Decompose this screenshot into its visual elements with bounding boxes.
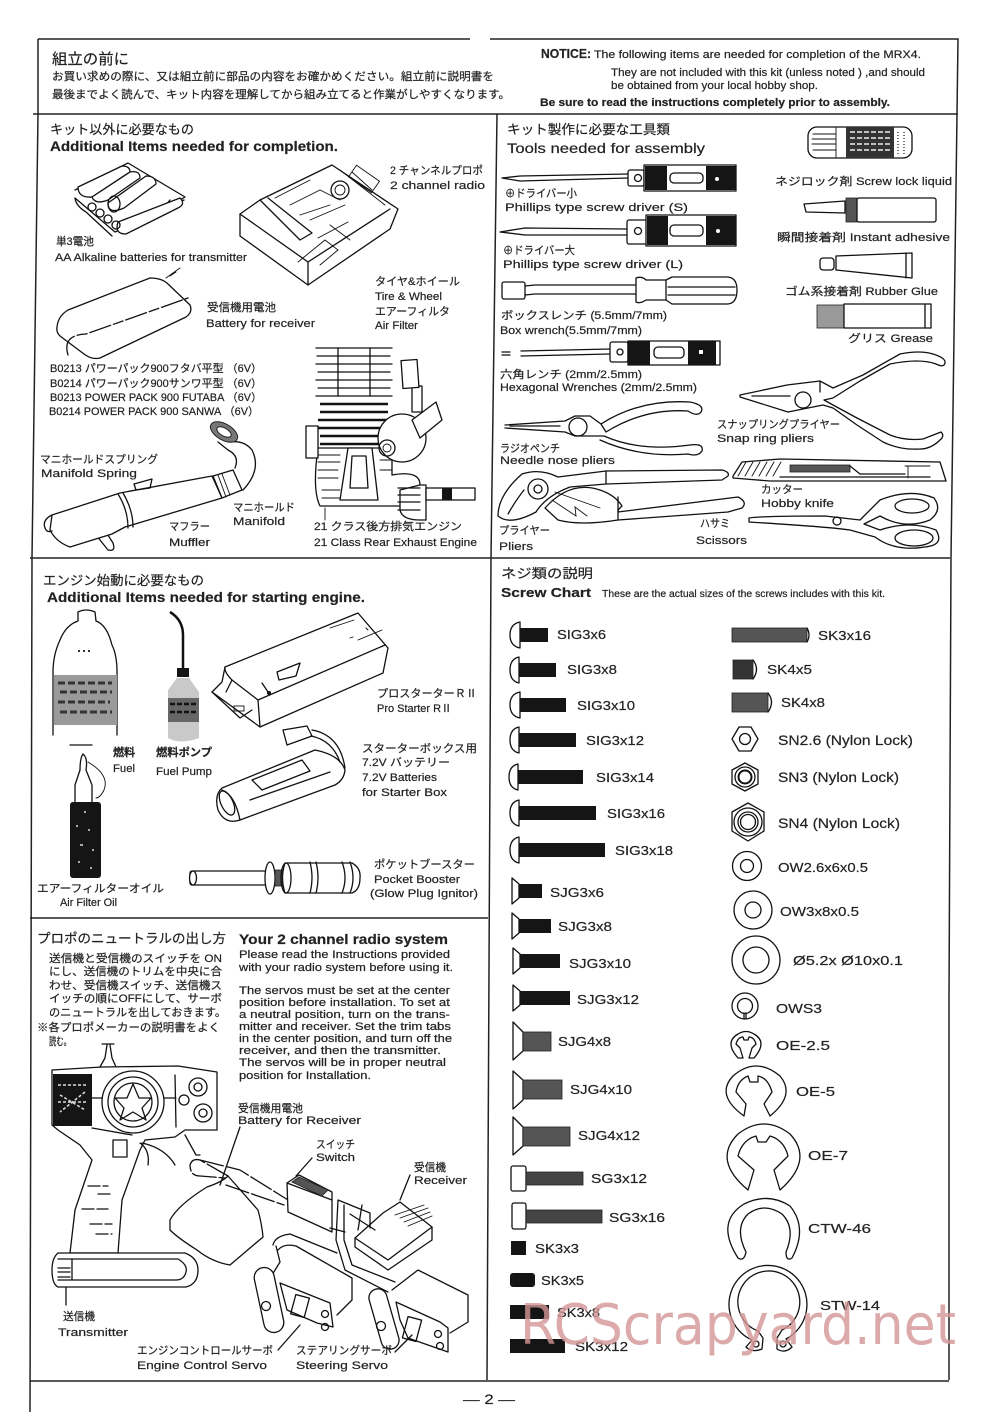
label: engine: 21 Class Rear Exhaust Engine xyxy=(314,537,477,549)
label: battery for receiver xyxy=(206,300,315,330)
panel: notice xyxy=(540,46,925,109)
label: fuel pump: 燃料ポンプ xyxy=(156,745,212,759)
item: OE-7 e-clip: OE-7 xyxy=(808,1148,848,1163)
label: receiver: Receiver xyxy=(414,1175,467,1187)
item: SJG4x10 xyxy=(513,1071,632,1109)
label: transmitter: Transmitter xyxy=(58,1327,128,1339)
label: large phillips screwdriver xyxy=(503,243,683,271)
text block: English instructions: receiver, and then the transmitter. xyxy=(239,1045,441,1057)
label: receiver: 受信機 xyxy=(414,1160,446,1174)
label: manifold spring: Manifold Spring xyxy=(41,468,137,480)
item: SJG3x6 xyxy=(512,878,604,904)
item: SIG3x6: SIG3x6 xyxy=(557,627,606,642)
item: OW3x8x0.5 washer xyxy=(734,891,859,929)
icon: pocket booster xyxy=(190,862,360,894)
label: tire and wheel, air filter: Tire & Wheel xyxy=(375,291,442,303)
item: OWS3 spring washer: OWS3 xyxy=(776,1001,822,1016)
item: SJG4x10: SJG4x10 xyxy=(570,1082,632,1097)
panel: items needed for starting engine xyxy=(37,573,478,909)
item: SIG3x8 xyxy=(510,657,617,683)
label: pliers xyxy=(499,524,550,553)
label: scissors: ハサミ xyxy=(700,517,730,530)
heading: starting engine: エンジン始動に必要なもの xyxy=(43,573,204,588)
text block: Japanese instructions xyxy=(37,951,226,1048)
hardware list: washers xyxy=(732,852,903,1019)
item: SIG3x14 xyxy=(509,764,654,790)
label: fuel xyxy=(113,745,135,775)
label: switch xyxy=(316,1138,355,1164)
hardware list: nuts xyxy=(732,727,913,841)
label: 7.2V batteries: スターターボックス用 xyxy=(362,742,477,755)
label: steering servo xyxy=(296,1335,412,1372)
item: SJG4x8: SJG4x8 xyxy=(558,1034,611,1049)
icon: 7.2V battery with connector xyxy=(216,726,345,821)
label: air filter oil xyxy=(37,882,164,909)
label: fuel: Fuel xyxy=(113,763,135,775)
item: OWS3 spring washer xyxy=(732,993,822,1019)
label: tire and wheel, air filter: エアーフィルタ xyxy=(375,305,450,318)
label: manifold: Manifold xyxy=(233,516,285,528)
text block: Japanese instructions: 読む。 xyxy=(49,1034,71,1048)
item: SG3x16: SG3x16 xyxy=(609,1210,665,1225)
item: STW-14 circlip: STW-14 xyxy=(820,1298,880,1313)
label: battery for receiver xyxy=(238,1101,361,1127)
icon: receiver xyxy=(330,1175,432,1292)
text block: Japanese instructions: にし、送信機のトリムを中央に合 xyxy=(49,964,222,978)
text block: Japanese instructions: わせ、受信機スイッチ、送信機ス xyxy=(49,978,222,992)
heading: screw chart: These are the actual sizes of the screws includes with this kit. xyxy=(602,589,885,600)
icon: hexagonal wrench xyxy=(502,341,720,365)
item: SIG3x10: SIG3x10 xyxy=(577,698,635,713)
icon: receiver battery pack xyxy=(57,268,191,358)
label: 7.2V batteries: for Starter Box xyxy=(362,787,448,799)
item: SIG3x10 xyxy=(510,692,635,718)
label: fuel pump: Fuel Pump xyxy=(156,766,212,778)
icon: switch xyxy=(287,1158,332,1232)
icon: fuel pump bottle xyxy=(168,612,199,742)
item: OE-5 e-clip xyxy=(726,1066,835,1116)
icon: rubber glue tube xyxy=(820,253,912,278)
panel: tools needed for assembly xyxy=(498,122,952,553)
label: power pack part numbers: B0213 パワーパック900フタバ平型 （6V） xyxy=(50,361,262,375)
text block: English instructions xyxy=(238,949,453,1082)
icon: grease tube xyxy=(817,304,931,328)
label: battery for receiver: Battery for receiver xyxy=(206,318,315,330)
item: SK3x16: SK3x16 xyxy=(818,628,871,643)
text block: English instructions: a neutral position, turn on the trans- xyxy=(239,1009,450,1021)
item: SN3 nylon lock nut xyxy=(732,763,899,791)
label: power pack part numbers xyxy=(49,361,262,418)
item: SN2.6 nylon lock nut xyxy=(732,727,913,751)
item: OW2.6x6x0.5 washer: OW2.6x6x0.5 xyxy=(778,860,868,875)
label: needle nose pliers: Needle nose pliers xyxy=(500,455,616,467)
label: AA batteries xyxy=(55,234,247,264)
item: 5.2x10x0.1 washer: Ø5.2x Ø10x0.1 xyxy=(793,953,903,968)
item: SN4 nylon lock nut: SN4 (Nylon Lock) xyxy=(778,815,900,831)
item: SIG3x12: SIG3x12 xyxy=(586,733,644,748)
item: SIG3x16: SIG3x16 xyxy=(607,806,665,821)
panel: additional items needed for completion xyxy=(40,122,485,550)
item: OE-2.5 e-clip: OE-2.5 xyxy=(776,1038,830,1053)
label: AA batteries: 単3電池 xyxy=(56,234,94,248)
heading: tools: キット製作に必要な工具類 xyxy=(507,122,670,137)
label: muffler: Muffler xyxy=(169,537,210,549)
item: SIG3x18: SIG3x18 xyxy=(615,843,673,858)
text block: English instructions: position before installation. To set at xyxy=(239,997,450,1009)
label: hexagonal wrench: Hexagonal Wrenches (2mm/2.5mm) xyxy=(500,382,697,394)
item: SIG3x18 xyxy=(510,837,673,863)
panel: notice: Be sure to read the instructions completely prior to assembly. xyxy=(540,97,890,109)
text block: Japanese instructions: 送信機と受信機のスイッチを ON xyxy=(49,951,222,965)
item: SG3x12: SG3x12 xyxy=(591,1171,647,1186)
item: SK4x5: SK4x5 xyxy=(767,662,812,677)
label: 7.2V batteries: 7.2V バッテリー xyxy=(362,756,450,769)
label: engine control servo: Engine Control Servo xyxy=(137,1360,267,1372)
item: CTW-46 circlip: CTW-46 xyxy=(808,1221,871,1236)
item: SIG3x12 xyxy=(510,727,644,753)
item: OE-2.5 e-clip xyxy=(731,1032,830,1058)
item: 5.2x10x0.1 washer xyxy=(732,936,903,984)
item: OE-7 e-clip xyxy=(727,1124,848,1190)
label: grease: グリス Grease xyxy=(848,331,933,345)
label: pocket booster: Pocket Booster xyxy=(374,874,460,886)
label: muffler xyxy=(169,521,210,549)
icon: hobby knife xyxy=(733,459,946,481)
panel: notice: be obtained from your local hobby shop. xyxy=(611,80,818,92)
heading: starting engine: Additional Items needed for starting engine. xyxy=(47,589,365,605)
label: 7.2V batteries xyxy=(362,742,477,799)
label: hobby knife xyxy=(761,483,834,510)
label: 7.2V batteries: 7.2V Batteries xyxy=(362,772,438,784)
icon: scissors xyxy=(749,493,939,548)
label: engine control servo xyxy=(137,1325,300,1372)
label: 2 channel radio: 2 チャンネルプロポ xyxy=(390,164,483,177)
item: SK3x8: SK3x8 xyxy=(557,1305,600,1320)
item: SJG3x6: SJG3x6 xyxy=(550,885,604,900)
label: small phillips screwdriver: ⊕ドライバー小 xyxy=(505,187,577,200)
heading: additional items xyxy=(50,122,338,154)
icon: needle nose pliers xyxy=(505,402,702,455)
text block: Japanese instructions: のニュートラルを出しておきます。 xyxy=(49,1006,226,1019)
watermark: RCScrapyard.net xyxy=(520,1293,956,1358)
icon: fuel bottle xyxy=(53,610,117,745)
label: manifold spring: マニホールドスプリング xyxy=(40,452,158,466)
item: SG3x12 xyxy=(511,1166,647,1191)
icon: 21 class engine xyxy=(306,348,475,520)
heading: screw chart: ネジ類の説明 xyxy=(501,566,593,581)
label: pro starter: Pro Starter RⅡ xyxy=(377,703,452,715)
label: power pack part numbers: B0213 POWER PACK 900 FUTABA （6V） xyxy=(50,391,262,404)
icon: 2 channel radio box xyxy=(240,165,398,285)
label: instant adhesive: 瞬間接着剤 Instant adhesive xyxy=(777,230,950,244)
item: SJG3x8 xyxy=(512,913,612,939)
text block: Japanese instructions: ※各プロポメーカーの説明書をよく xyxy=(37,1020,220,1034)
label: hexagonal wrench xyxy=(500,368,697,394)
screw list: button head screws xyxy=(509,622,673,863)
item: SK4x8: SK4x8 xyxy=(781,695,825,710)
label: pro starter xyxy=(377,687,477,715)
label: power pack part numbers: B0214 パワーパック900サンワ平型 （6V） xyxy=(50,376,262,390)
label: pro starter: プロスターターＲⅡ xyxy=(377,687,477,700)
icon: box wrench xyxy=(502,277,737,304)
text block: English instructions: position for Installation. xyxy=(239,1070,371,1082)
heading: screw chart xyxy=(501,566,885,600)
label: small phillips screwdriver: Phillips type screw driver (S) xyxy=(505,202,688,214)
heading: before assembly: 組立の前に xyxy=(52,51,129,68)
item: SJG3x10: SJG3x10 xyxy=(569,956,631,971)
label: scissors: Scissors xyxy=(696,535,748,547)
item: SJG3x10 xyxy=(513,948,631,974)
item: SG3x16 xyxy=(512,1203,665,1229)
label: pliers: Pliers xyxy=(499,541,534,553)
item: SIG3x14: SIG3x14 xyxy=(596,770,654,785)
heading: radio system (English): Your 2 channel radio system xyxy=(239,931,448,947)
icon: engine control servo xyxy=(252,1234,352,1334)
label: battery for receiver: 受信機用電池 xyxy=(238,1101,303,1115)
item: SJG4x8 xyxy=(513,1022,611,1060)
icon: water pump pliers xyxy=(498,470,744,523)
text block: Japanese introduction xyxy=(52,69,510,101)
icon: AA batteries xyxy=(75,163,185,236)
label: snap ring pliers xyxy=(717,417,840,445)
label: switch: Switch xyxy=(316,1152,355,1164)
label: receiver xyxy=(414,1160,467,1187)
label: air filter oil: Air Filter Oil xyxy=(60,897,117,909)
label: battery for receiver: 受信機用電池 xyxy=(207,300,276,314)
panel: notice: They are not included with this kit (unless noted ) ,and should xyxy=(611,67,925,79)
label: battery for receiver: Battery for Receiver xyxy=(238,1115,361,1127)
label: needle nose pliers: ラジオペンチ xyxy=(500,442,560,455)
item: OW3x8x0.5 washer: OW3x8x0.5 xyxy=(780,904,859,919)
label: fuel pump xyxy=(156,745,212,778)
label: steering servo: ステアリングサーボ xyxy=(296,1343,392,1357)
icon: snap ring pliers xyxy=(740,352,945,449)
item: SN2.6 nylon lock nut: SN2.6 (Nylon Lock) xyxy=(778,732,913,748)
icon: wiring diagram xyxy=(137,1127,468,1372)
label: switch: スイッチ xyxy=(316,1138,355,1151)
hardware list: set screws right xyxy=(732,628,871,712)
icon: instant adhesive xyxy=(804,198,936,222)
text block: English instructions: mitter and receiver. Set the trim tabs xyxy=(239,1021,452,1033)
panel: notice: The following items are needed for completion of the MRX4. xyxy=(594,49,921,61)
label: small phillips screwdriver xyxy=(505,187,688,214)
item: OE-5 e-clip: OE-5 xyxy=(796,1084,835,1099)
label: transmitter xyxy=(58,1309,128,1339)
screw list: countersunk screws xyxy=(511,878,665,1229)
label: pocket booster xyxy=(370,857,478,900)
text block: English instructions: The servos will be in proper neutral xyxy=(239,1057,446,1069)
item: SK3x5: SK3x5 xyxy=(541,1273,584,1288)
label: 2 channel radio xyxy=(390,164,485,192)
heading: radio neutral (Japanese): プロポのニュートラルの出し方 xyxy=(37,931,226,946)
icon: small phillips screwdriver xyxy=(502,165,736,191)
page number: — 2 — xyxy=(463,1391,515,1407)
text block: Japanese instructions: イッチの順にOFFにして、サーボ xyxy=(49,992,222,1005)
label: hexagonal wrench: 六角レンチ (2mm/2.5mm) xyxy=(500,368,642,381)
label: scissors xyxy=(696,517,748,547)
label: pocket booster: (Glow Plug Ignitor) xyxy=(370,888,478,900)
heading: tools: Tools needed for assembly xyxy=(507,140,705,156)
label: transmitter: 送信機 xyxy=(63,1309,95,1323)
label: box wrench xyxy=(500,309,667,337)
label: large phillips screwdriver: Phillips type screw driver (L) xyxy=(503,259,683,271)
label: power pack part numbers: B0214 POWER PACK 900 SANWA （6V） xyxy=(49,405,259,418)
item: SJG3x12 xyxy=(513,985,639,1011)
item: SK3x3: SK3x3 xyxy=(535,1241,579,1256)
heading: additional items: Additional Items needed for completion. xyxy=(50,138,338,154)
item: SJG4x12 xyxy=(513,1117,640,1155)
item: SN3 nylon lock nut: SN3 (Nylon Lock) xyxy=(778,769,899,785)
label: steering servo: Steering Servo xyxy=(296,1360,388,1372)
item: SIG3x6 xyxy=(510,622,606,648)
item: SIG3x8: SIG3x8 xyxy=(567,662,617,677)
icon: large phillips screwdriver xyxy=(500,215,736,246)
label: tire and wheel, air filter: Air Filter xyxy=(375,320,418,332)
text block: English instructions: in the center position, and turn off the xyxy=(239,1033,452,1045)
icon: muffler and manifold xyxy=(44,418,255,550)
hardware list: retaining clips xyxy=(726,1032,880,1351)
label: screw lock liquid: ネジロック剤 Screw lock liquid xyxy=(775,175,952,188)
item: SJG3x12: SJG3x12 xyxy=(577,992,639,1007)
item: SJG4x12: SJG4x12 xyxy=(578,1128,640,1143)
label: engine control servo: エンジンコントロールサーボ xyxy=(137,1344,273,1357)
label: engine: 21 クラス後方排気エンジン xyxy=(314,519,462,533)
label: engine xyxy=(314,519,477,549)
label: tire and wheel, air filter: タイヤ&ホイール xyxy=(375,275,460,288)
heading: screw chart: Screw Chart xyxy=(501,585,592,600)
item: OW2.6x6x0.5 washer xyxy=(732,852,868,880)
label: manifold spring xyxy=(40,452,158,480)
label: muffler: マフラー xyxy=(169,521,210,533)
icon: steering servo xyxy=(367,1270,468,1352)
panel: before assembly note (Japanese) xyxy=(52,51,510,101)
heading: additional items: キット以外に必要なもの xyxy=(50,122,194,137)
label: manifold xyxy=(233,501,295,528)
item: SN4 nylon lock nut xyxy=(732,803,900,841)
label: AA batteries: AA Alkaline batteries for transmitter xyxy=(55,252,247,264)
panel: notice: NOTICE: xyxy=(541,46,591,61)
icon: screw lock bottle xyxy=(808,127,912,158)
item: CTW-46 circlip xyxy=(728,1198,871,1259)
label: pliers: プライヤー xyxy=(499,524,550,537)
text block: English instructions: with your radio system before using it. xyxy=(238,962,453,974)
label: air filter oil: エアーフィルターオイル xyxy=(37,882,164,895)
label: box wrench: Box wrench(5.5mm/7mm) xyxy=(500,325,642,337)
panel: screw chart xyxy=(501,566,913,1354)
heading: tools xyxy=(507,122,705,156)
label: box wrench: ボックスレンチ (5.5mm/7mm) xyxy=(501,309,667,322)
label: pocket booster: ポケットブースター xyxy=(374,857,475,871)
label: large phillips screwdriver: ⊕ドライバー大 xyxy=(503,243,575,257)
heading: starting engine xyxy=(43,573,365,605)
item: SIG3x16 xyxy=(510,800,665,826)
icon: transmitter xyxy=(52,1044,217,1305)
label: rubber glue: ゴム系接着剤 Rubber Glue xyxy=(785,284,938,298)
label: hobby knife: Hobby knife xyxy=(761,498,834,510)
label: needle nose pliers xyxy=(500,442,616,467)
label: tire and wheel, air filter xyxy=(375,275,460,332)
icon: receiver battery outline xyxy=(170,1176,263,1265)
item: SJG3x8: SJG3x8 xyxy=(558,919,612,934)
label: snap ring pliers: スナップリングプライヤー xyxy=(717,417,840,431)
icon: pro starter box xyxy=(212,613,388,727)
label: manifold: マニホールド xyxy=(233,501,295,514)
label: fuel: 燃料 xyxy=(113,745,135,759)
screw list: set screws left xyxy=(510,1241,628,1354)
item: STW-14 circlip xyxy=(729,1265,880,1351)
item: SK3x12: SK3x12 xyxy=(575,1339,628,1354)
icon: air filter oil bottle xyxy=(70,754,105,878)
label: 2 channel radio: 2 channel radio xyxy=(390,180,485,192)
panel: radio system neutral setup xyxy=(37,931,468,1372)
label: hobby knife: カッター xyxy=(761,483,803,496)
text block: English instructions: Please read the Instructions provided xyxy=(239,949,450,961)
text block: Japanese introduction: 最後までよく読んで、キット内容を理解してから組み立てると作業がしやすくなります。 xyxy=(52,87,510,101)
label: snap ring pliers: Snap ring pliers xyxy=(717,433,815,445)
text block: Japanese introduction: お買い求めの際に、又は組立前に部品の内容をお確かめください。組立前に説明書を xyxy=(52,69,494,83)
text block: English instructions: The servos must be set at the center xyxy=(239,985,450,997)
